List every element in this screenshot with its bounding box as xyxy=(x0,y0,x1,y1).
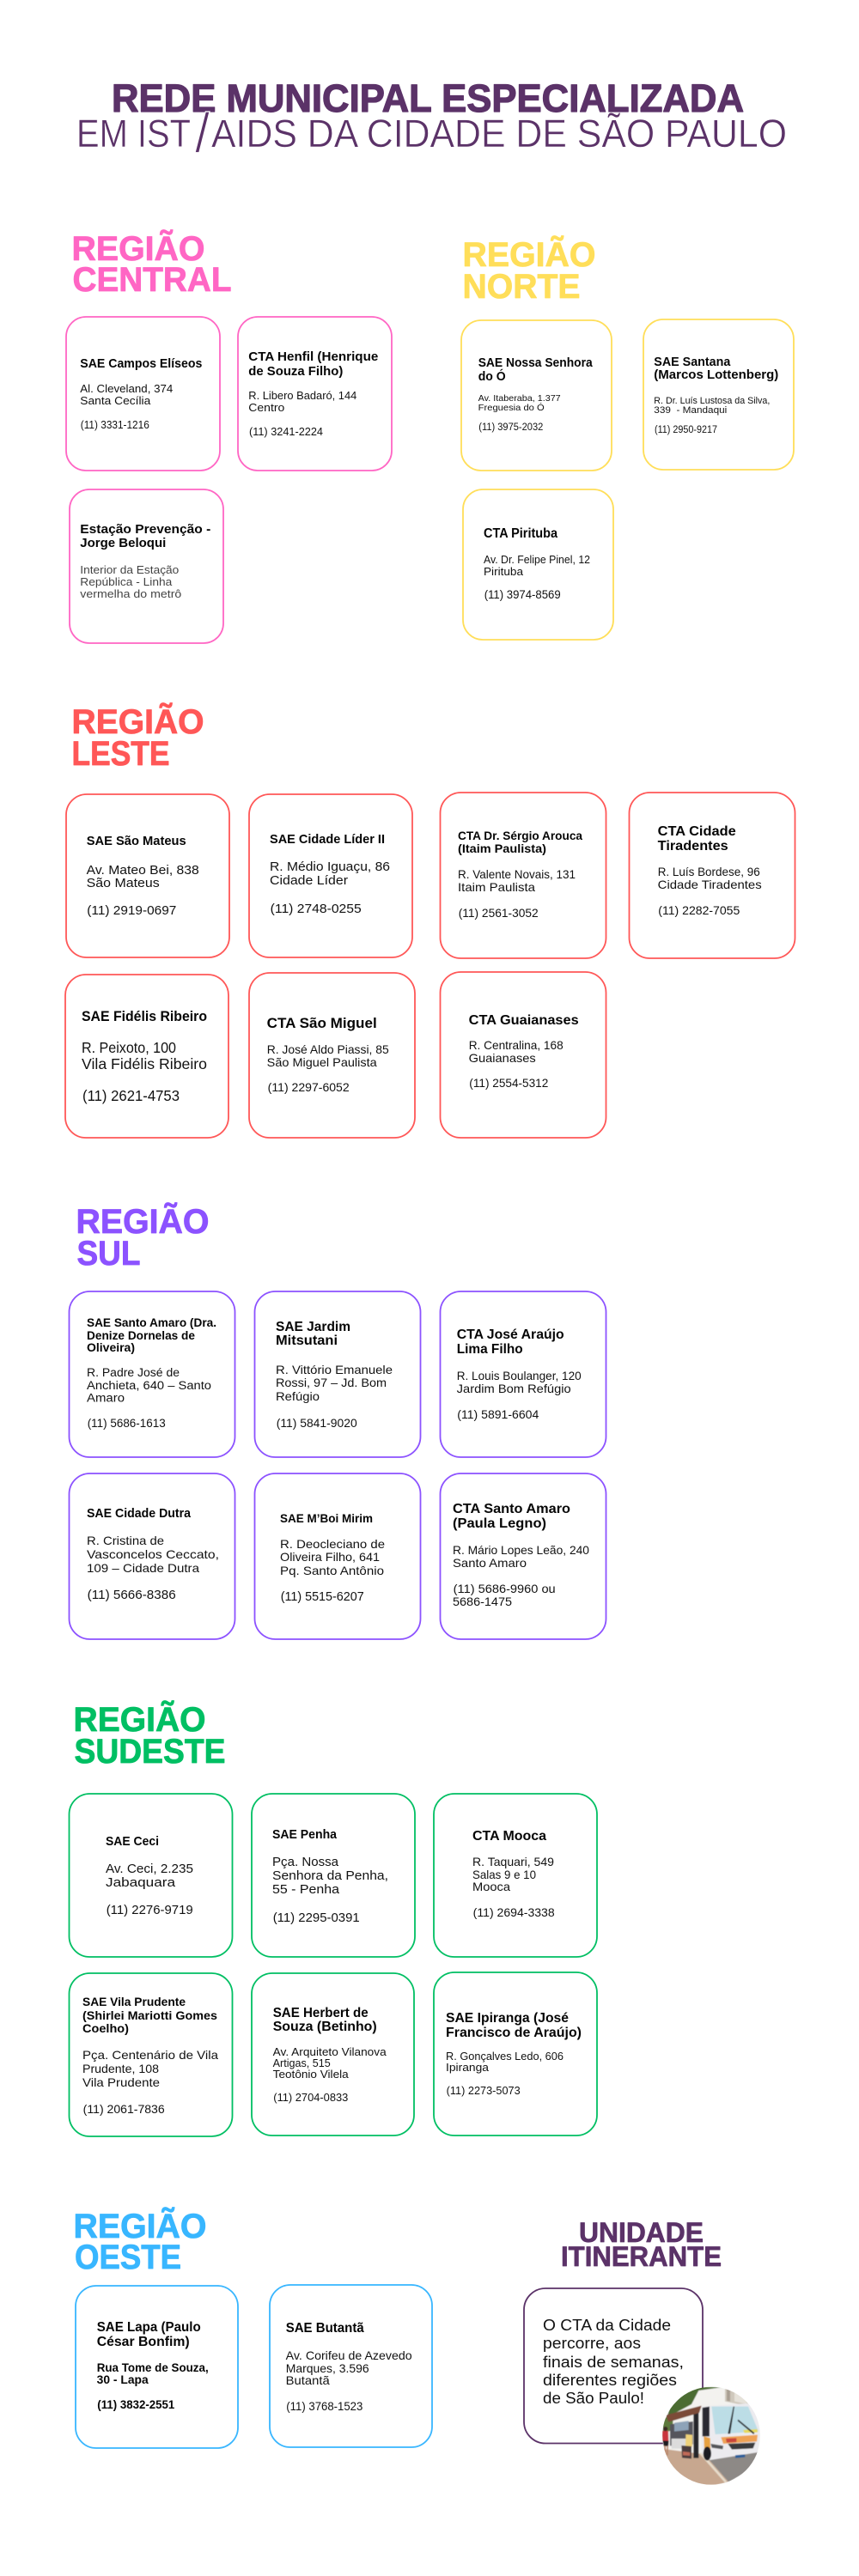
panel: Região Central xyxy=(66,228,392,643)
card: CTA Santo Amaro: (Paula Legno) xyxy=(453,1516,546,1531)
card: SAE Vila Prudente: Coelho) xyxy=(82,2021,129,2035)
card: CTA Mooca: CTA Mooca xyxy=(472,1829,546,1844)
card: CTA da Cidade description: percorre, aos xyxy=(543,2334,641,2352)
card: SAE Herbert de Souza: Souza (Betinho) xyxy=(273,2020,377,2034)
card: SAE Santana: (Marcos Lottenberg) xyxy=(654,368,778,382)
card: SAE M'Boi Mirim: R. Deocleciano de xyxy=(280,1537,385,1551)
card: SAE Penha xyxy=(252,1794,415,1957)
card: SAE Cidade Líder II: R. Médio Iguaçu, 86 xyxy=(270,860,390,874)
card: SAE Cidade Líder II: SAE Cidade Líder II xyxy=(270,832,385,847)
card: CTA Santo Amaro: CTA Santo Amaro xyxy=(453,1502,570,1516)
card: CTA Mooca: Salas 9 e 10 xyxy=(472,1868,536,1881)
card: SAE Ipiranga: Francisco de Araújo) xyxy=(446,2026,582,2040)
card: SAE Santo Amaro: SAE Santo Amaro (Dra. xyxy=(87,1315,216,1329)
card: SAE Herbert de Souza: Av. Arquiteto Vilanova xyxy=(273,2046,387,2058)
card: SAE Penha: 55 - Penha xyxy=(272,1882,340,1897)
card: SAE Cidade Líder II xyxy=(249,794,412,957)
heading: Região Sudeste: SUDESTE xyxy=(74,1733,225,1771)
card: SAE M'Boi Mirim: (11) 5515-6207 xyxy=(281,1590,364,1604)
card: SAE Ceci xyxy=(69,1794,232,1957)
card: CTA Dr. Sérgio Arouca xyxy=(440,793,606,958)
card: CTA da Cidade description: de São Paulo! xyxy=(543,2389,644,2407)
card: SAE Butantã xyxy=(270,2285,432,2447)
card: SAE Penha: SAE Penha xyxy=(272,1827,338,1842)
card: CTA Cidade Tiradentes: (11) 2282-7055 xyxy=(658,903,740,917)
card: CTA Dr. Sérgio Arouca: (Itaim Paulista) xyxy=(458,841,546,855)
card: SAE Cidade Dutra: SAE Cidade Dutra xyxy=(87,1506,192,1521)
title: EM IST xyxy=(76,112,191,155)
card: SAE Santo Amaro xyxy=(69,1291,235,1457)
card: CTA São Miguel: (11) 2297-6052 xyxy=(268,1080,350,1094)
card: SAE Lapa: Rua Tome de Souza, xyxy=(97,2361,209,2374)
card: CTA Santo Amaro: 5686-1475 xyxy=(453,1595,512,1608)
card: SAE Jardim Mitsutani: SAE Jardim xyxy=(276,1320,350,1334)
card: CTA Henfil: CTA Henfil (Henrique xyxy=(248,349,378,364)
card: SAE Cidade Dutra: R. Cristina de xyxy=(87,1534,164,1547)
card: SAE Santo Amaro: Anchieta, 640 – Santo xyxy=(87,1379,211,1392)
card: CTA da Cidade description xyxy=(524,2288,703,2444)
card: SAE Butantã: Marques, 3.596 xyxy=(286,2361,369,2375)
card: CTA Santo Amaro: (11) 5686-9960 ou xyxy=(454,1582,556,1595)
card: SAE Ipiranga: SAE Ipiranga (José xyxy=(446,2011,569,2026)
card: CTA Henfil xyxy=(238,317,392,471)
heading: Região Norte xyxy=(462,234,596,306)
card: CTA Pirituba xyxy=(463,489,613,640)
card: SAE Santana: R. Dr. Luís Lustosa da Silva, xyxy=(654,396,770,406)
card: Estação Prevenção: Interior da Estação xyxy=(80,563,179,576)
panel: Unidade Itinerante xyxy=(524,2217,762,2488)
card: CTA José Araújo Lima Filho: Jardim Bom Refúgio xyxy=(457,1382,571,1395)
card: CTA Cidade Tiradentes: Tiradentes xyxy=(658,839,728,854)
card: SAE Herbert de Souza: (11) 2704-0833 xyxy=(273,2092,348,2104)
card: SAE Herbert de Souza: SAE Herbert de xyxy=(273,2006,369,2020)
card: SAE Ipiranga: Ipiranga xyxy=(446,2062,489,2074)
card: SAE Jardim Mitsutani: (11) 5841-9020 xyxy=(277,1416,357,1430)
card: SAE Lapa: 30 - Lapa xyxy=(97,2373,149,2386)
card: CTA Dr. Sérgio Arouca: CTA Dr. Sérgio Arouca xyxy=(458,829,582,842)
card: CTA Cidade Tiradentes: CTA Cidade xyxy=(658,824,736,839)
card: SAE Herbert de Souza: Teotônio Vilela xyxy=(273,2069,349,2081)
card: SAE Nossa Senhora do Ó: (11) 3975-2032 xyxy=(478,422,543,433)
heading: Região Leste xyxy=(72,702,204,773)
card: SAE Ipiranga: (11) 2273-5073 xyxy=(447,2085,521,2097)
card: SAE Nossa Senhora do Ó: Freguesia do Ó xyxy=(478,402,545,413)
card: SAE Butantã: (11) 3768-1523 xyxy=(286,2399,362,2413)
card: SAE Vila Prudente: (11) 2061-7836 xyxy=(83,2102,165,2116)
card: CTA da Cidade description: diferentes regiões xyxy=(543,2371,677,2389)
card: SAE Campos Elíseos: Santa Cecília xyxy=(80,394,151,407)
heading: Unidade Itinerante: ITINERANTE xyxy=(561,2241,722,2272)
panel: Região Sul xyxy=(69,1201,606,1639)
card: CTA Guaianases xyxy=(440,972,606,1138)
card: CTA Santo Amaro xyxy=(440,1473,606,1639)
card: SAE Herbert de Souza xyxy=(252,1973,414,2136)
card: CTA Guaianases: Guaianases xyxy=(469,1051,536,1065)
title: REDE MUNICIPAL ESPECIALIZADA xyxy=(112,76,744,120)
card: SAE Lapa: SAE Lapa (Paulo xyxy=(97,2320,201,2335)
card: CTA Santo Amaro: R. Mário Lopes Leão, 240 xyxy=(453,1543,589,1557)
card: SAE São Mateus xyxy=(66,794,229,957)
card: SAE Cidade Dutra: Vasconcelos Ceccato, xyxy=(87,1547,219,1561)
card: CTA Guaianases: R. Centralina, 168 xyxy=(469,1038,564,1052)
card: SAE Butantã: Av. Corifeu de Azevedo xyxy=(286,2348,412,2362)
card: CTA Henfil: (11) 3241-2224 xyxy=(249,425,323,438)
card: CTA São Miguel xyxy=(249,973,415,1138)
card: SAE Santo Amaro: Amaro xyxy=(87,1391,125,1405)
heading: Região Leste: LESTE xyxy=(72,735,170,773)
title xyxy=(76,76,787,164)
card: CTA Henfil: R. Libero Badaró, 144 xyxy=(248,389,356,402)
card: CTA José Araújo Lima Filho: CTA José Araújo xyxy=(457,1327,564,1342)
heading: Região Oeste: REGIÃO xyxy=(74,2206,206,2245)
card: CTA Dr. Sérgio Arouca: (11) 2561-3052 xyxy=(459,906,539,920)
card: SAE Santana xyxy=(643,319,794,470)
card: SAE Butantã: SAE Butantã xyxy=(286,2321,364,2336)
card: SAE Penha: (11) 2295-0391 xyxy=(273,1911,360,1925)
card: CTA da Cidade description: finais de semanas, xyxy=(543,2353,684,2371)
card: SAE Herbert de Souza: Artigas, 515 xyxy=(273,2057,331,2069)
card: SAE Campos Elíseos: Al. Cleveland, 374 xyxy=(80,382,173,395)
card: SAE Lapa: (11) 3832-2551 xyxy=(97,2398,175,2411)
card: SAE Vila Prudente: Prudente, 108 xyxy=(82,2062,159,2075)
card: CTA José Araújo Lima Filho: R. Louis Boulanger, 120 xyxy=(457,1369,582,1382)
heading: Região Central xyxy=(72,228,232,299)
card: SAE Fidélis Ribeiro: SAE Fidélis Ribeiro xyxy=(82,1009,207,1024)
card: SAE Vila Prudente: Vila Prudente xyxy=(82,2075,160,2089)
card: CTA Mooca: Mooca xyxy=(472,1880,510,1893)
card: SAE M'Boi Mirim: Oliveira Filho, 641 xyxy=(280,1550,380,1564)
card: SAE São Mateus: São Mateus xyxy=(87,876,160,890)
card: CTA São Miguel: CTA São Miguel xyxy=(267,1015,377,1031)
card: SAE Ipiranga xyxy=(434,1972,597,2136)
card: CTA José Araújo Lima Filho xyxy=(440,1291,606,1457)
card: CTA Cidade Tiradentes: Cidade Tiradentes xyxy=(658,878,762,891)
heading: Região Central: CENTRAL xyxy=(72,261,232,299)
card: SAE Jardim Mitsutani: Mitsutani xyxy=(276,1334,338,1348)
card: CTA da Cidade description: O CTA da Cidade xyxy=(543,2316,671,2334)
card: SAE M'Boi Mirim: Pq. Santo Antônio xyxy=(280,1564,384,1577)
card: Estação Prevenção: vermelha do metrô xyxy=(80,587,181,600)
card: SAE Campos Elíseos: SAE Campos Elíseos xyxy=(80,356,202,371)
card: CTA José Araújo Lima Filho: Lima Filho xyxy=(457,1342,523,1357)
card: CTA Mooca xyxy=(434,1794,597,1957)
card: CTA Pirituba: (11) 3974-8569 xyxy=(484,588,561,601)
card: SAE Ceci: Av. Ceci, 2.235 xyxy=(106,1862,193,1876)
card: Estação Prevenção: Estação Prevenção - xyxy=(80,522,210,537)
card: CTA Henfil: de Souza Filho) xyxy=(248,364,343,379)
card: CTA José Araújo Lima Filho: (11) 5891-6604 xyxy=(457,1407,539,1421)
card: CTA São Miguel: São Miguel Paulista xyxy=(267,1055,377,1069)
heading: Região Oeste xyxy=(74,2206,206,2276)
card: SAE Campos Elíseos: (11) 3331-1216 xyxy=(81,418,149,431)
heading: Região Oeste: OESTE xyxy=(75,2239,181,2276)
card: SAE Vila Prudente: SAE Vila Prudente xyxy=(82,1995,186,2008)
card: SAE Jardim Mitsutani: Rossi, 97 – Jd. Bom xyxy=(276,1376,387,1389)
card: CTA Mooca: (11) 2694-3338 xyxy=(473,1905,555,1919)
card: SAE Ceci: Jabaquara xyxy=(106,1875,176,1890)
card: CTA Pirituba: CTA Pirituba xyxy=(484,526,557,541)
card: SAE Santana: 339 - Mandaqui xyxy=(654,405,727,416)
heading: Região Norte: REGIÃO xyxy=(462,234,596,274)
card: SAE Fidélis Ribeiro: R. Peixoto, 100 xyxy=(82,1039,176,1056)
card: SAE Fidélis Ribeiro xyxy=(65,975,228,1138)
card: SAE Jardim Mitsutani: Refúgio xyxy=(276,1389,320,1403)
card: SAE Campos Elíseos xyxy=(66,317,220,471)
card: CTA Guaianases: CTA Guaianases xyxy=(469,1013,579,1028)
card: CTA Mooca: R. Taquari, 549 xyxy=(472,1855,554,1868)
card: SAE Penha: Pça. Nossa xyxy=(272,1855,339,1869)
card: CTA Santo Amaro: Santo Amaro xyxy=(453,1556,527,1570)
card: SAE Cidade Dutra xyxy=(69,1473,235,1639)
heading: Região Sul: SUL xyxy=(77,1235,141,1273)
card: CTA Guaianases: (11) 2554-5312 xyxy=(469,1076,549,1090)
card: SAE Ceci: SAE Ceci xyxy=(106,1834,159,1849)
panel: Região Oeste xyxy=(74,2206,432,2448)
card: CTA Cidade Tiradentes xyxy=(629,793,795,958)
panel: Região Sudeste xyxy=(69,1699,597,2136)
card: SAE M'Boi Mirim: SAE M’Boi Mirim xyxy=(280,1511,373,1525)
card: CTA Henfil: Centro xyxy=(248,401,284,414)
card: SAE Ceci: (11) 2276-9719 xyxy=(107,1903,193,1917)
card: SAE Santana: SAE Santana xyxy=(654,355,731,369)
card: SAE Vila Prudente: Pça. Centenário de Vila xyxy=(82,2048,218,2062)
card: CTA Pirituba: Pirituba xyxy=(484,565,524,578)
card: SAE Santana: (11) 2950-9217 xyxy=(655,425,717,435)
card: SAE Santo Amaro: Denize Dornelas de xyxy=(87,1328,195,1342)
panel: Região Leste xyxy=(65,702,795,1138)
card: SAE Nossa Senhora do Ó: Av. Itaberaba, 1.377 xyxy=(478,393,561,404)
card: SAE São Mateus: (11) 2919-0697 xyxy=(87,903,176,918)
card: SAE Nossa Senhora do Ó xyxy=(461,320,612,471)
card: SAE Cidade Dutra: (11) 5666-8386 xyxy=(88,1588,176,1602)
card: SAE Fidélis Ribeiro: (11) 2621-4753 xyxy=(82,1087,180,1104)
card: CTA Cidade Tiradentes: R. Luís Bordese, 96 xyxy=(658,865,760,878)
heading: Região Leste: REGIÃO xyxy=(72,702,204,741)
card: SAE Fidélis Ribeiro: Vila Fidélis Ribeiro xyxy=(82,1055,207,1072)
card: SAE São Mateus: SAE São Mateus xyxy=(87,834,186,848)
heading: Região Norte: NORTE xyxy=(462,268,581,306)
card: SAE Jardim Mitsutani: R. Vittório Emanuele xyxy=(276,1363,393,1376)
card: Estação Prevenção xyxy=(70,489,223,643)
card: SAE Nossa Senhora do Ó: SAE Nossa Senhora xyxy=(478,356,594,370)
title: AIDS DA CIDADE DE SÃO PAULO xyxy=(211,112,787,155)
heading: Região Central: REGIÃO xyxy=(72,228,204,268)
card: CTA Dr. Sérgio Arouca: R. Valente Novais, 131 xyxy=(458,867,576,881)
heading: Região Sudeste: REGIÃO xyxy=(74,1699,206,1739)
card: Estação Prevenção: Jorge Beloqui xyxy=(80,536,166,550)
panel: Região Norte xyxy=(461,234,794,640)
card: SAE Cidade Líder II: Cidade Líder xyxy=(270,873,348,888)
heading: Unidade Itinerante: UNIDADE xyxy=(579,2217,704,2248)
card: SAE Lapa xyxy=(76,2286,238,2448)
card: Estação Prevenção: República - Linha xyxy=(80,575,173,588)
card: CTA Dr. Sérgio Arouca: Itaim Paulista xyxy=(458,880,535,894)
card: SAE Santo Amaro: Oliveira) xyxy=(87,1340,135,1354)
card: SAE Penha: Senhora da Penha, xyxy=(272,1868,388,1883)
card: SAE Santo Amaro: R. Padre José de xyxy=(87,1366,180,1379)
heading: Unidade Itinerante xyxy=(561,2217,722,2272)
card: SAE São Mateus: Av. Mateo Bei, 838 xyxy=(87,863,199,878)
card: SAE Vila Prudente: (Shirlei Mariotti Gomes xyxy=(82,2008,217,2022)
card: SAE Nossa Senhora do Ó: do Ó xyxy=(478,368,506,384)
card: SAE Santo Amaro: (11) 5686-1613 xyxy=(88,1416,166,1430)
heading: Região Sudeste xyxy=(74,1699,225,1771)
card: SAE Cidade Dutra: 109 – Cidade Dutra xyxy=(87,1561,199,1575)
card: SAE M'Boi Mirim xyxy=(254,1473,421,1639)
card: SAE Lapa: César Bonfim) xyxy=(97,2335,190,2349)
card: CTA Pirituba: Av. Dr. Felipe Pinel, 12 xyxy=(484,553,590,566)
icon: circular picture of the CTA bus xyxy=(661,2387,762,2488)
card: CTA São Miguel: R. José Aldo Piassi, 85 xyxy=(267,1042,389,1056)
card: SAE Cidade Líder II: (11) 2748-0255 xyxy=(271,902,362,916)
card: SAE Jardim Mitsutani xyxy=(254,1291,421,1457)
heading: Região Sul xyxy=(76,1201,210,1273)
title: / xyxy=(195,101,210,164)
card: SAE Ipiranga: R. Gonçalves Ledo, 606 xyxy=(446,2050,564,2063)
card: SAE Vila Prudente xyxy=(69,1973,232,2136)
card: SAE Butantã: Butantã xyxy=(286,2373,330,2387)
heading: Região Sul: REGIÃO xyxy=(76,1201,210,1241)
